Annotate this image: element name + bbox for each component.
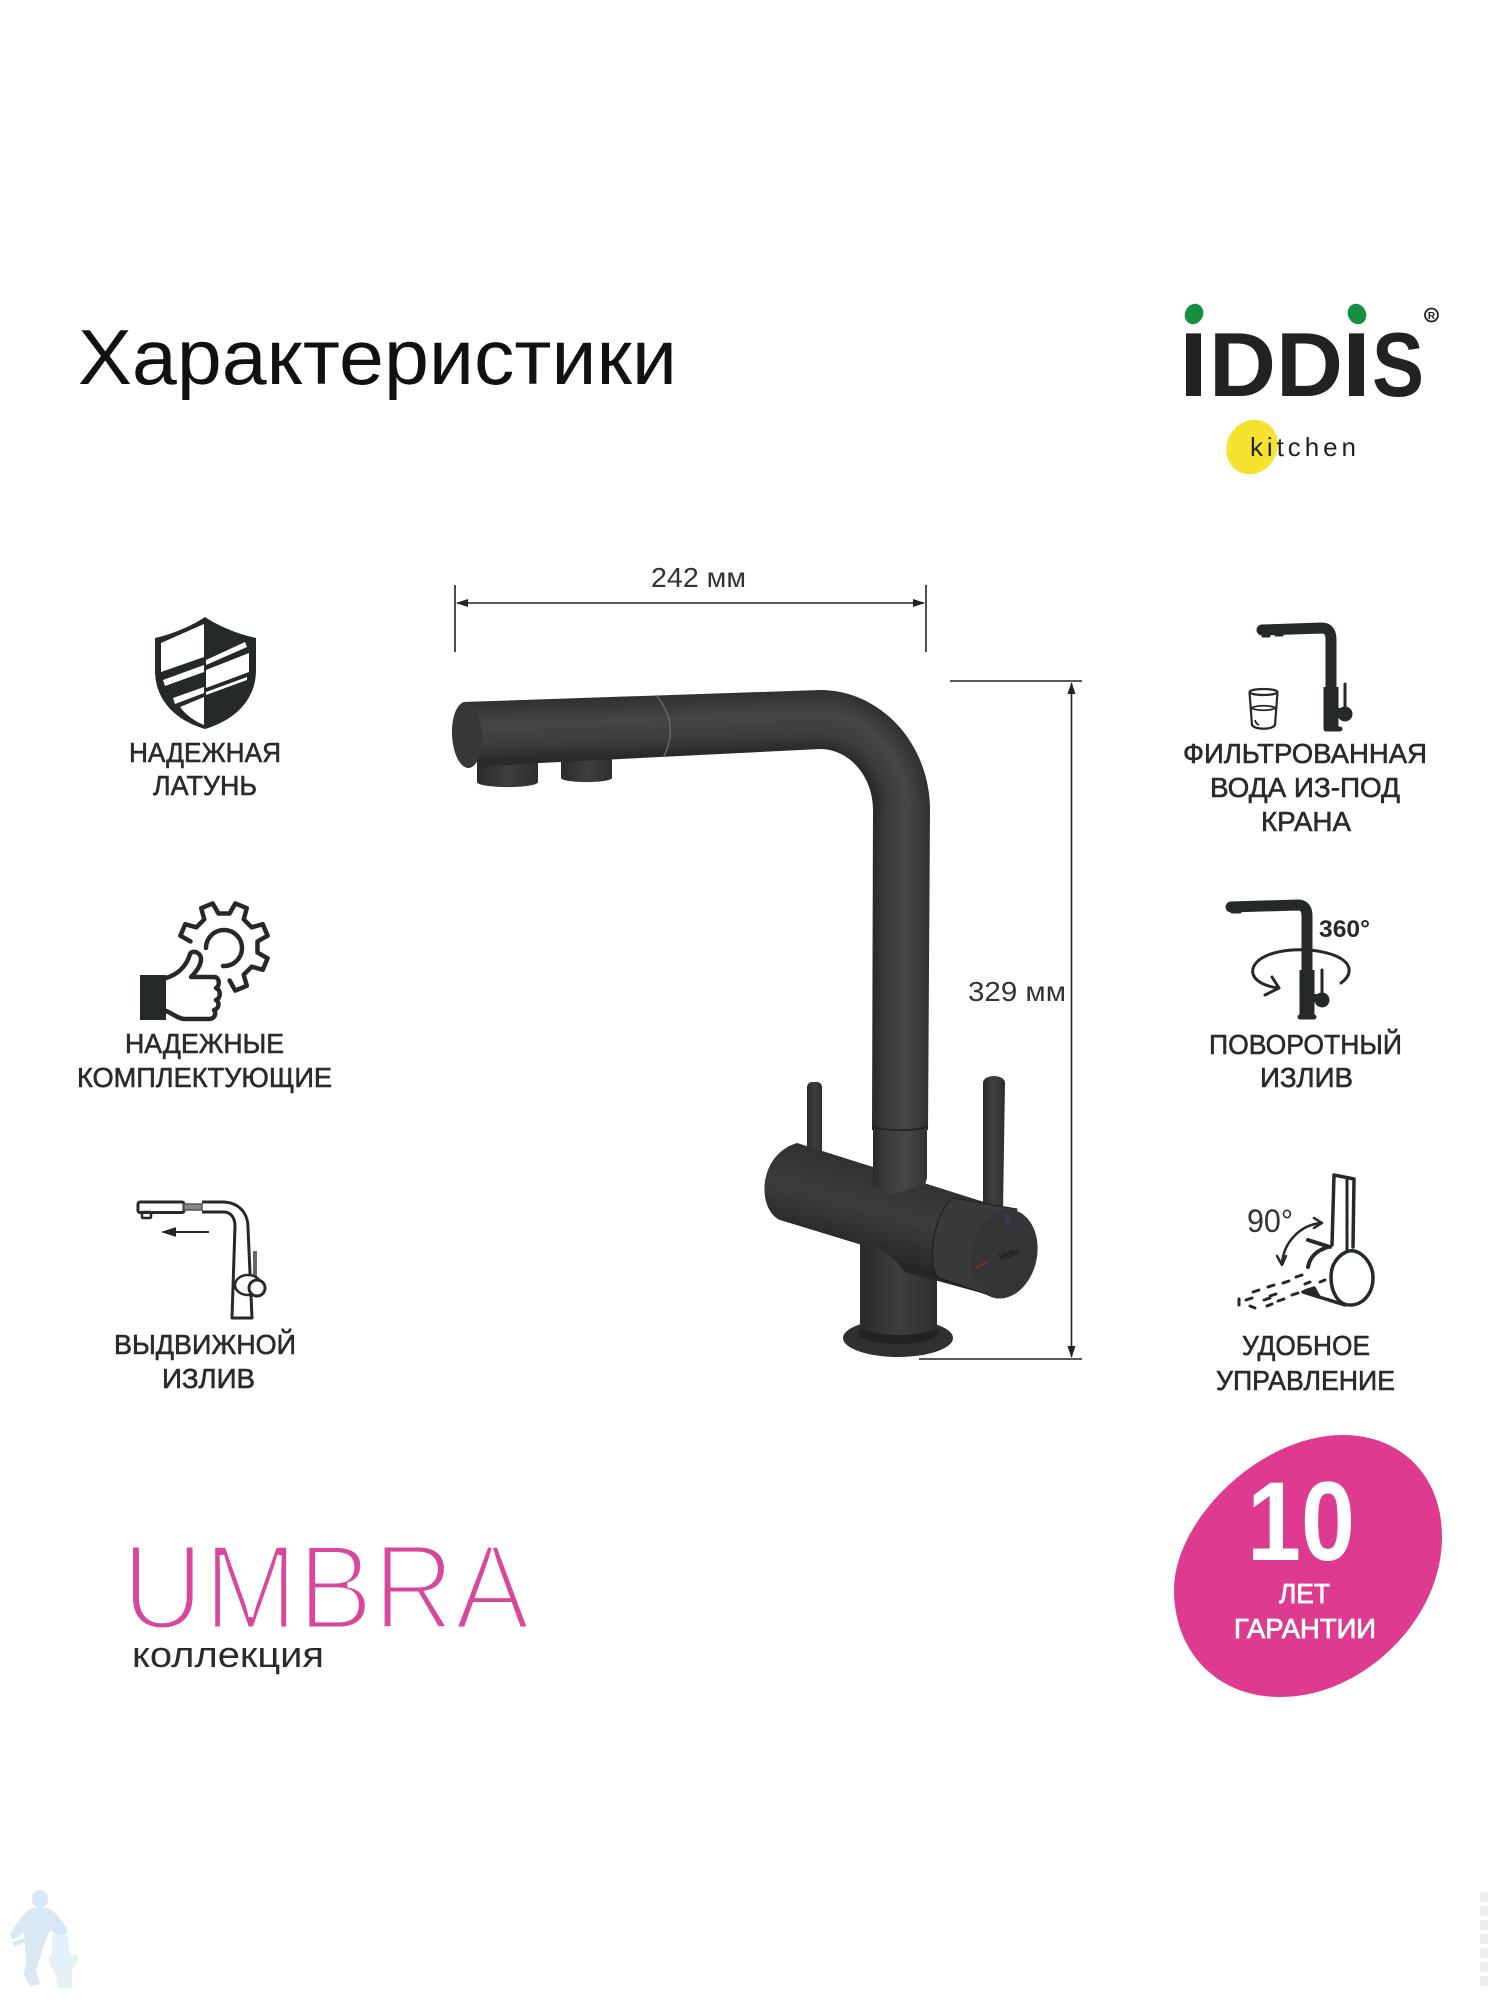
pull-out seam (656, 695, 670, 756)
icon: pull-out faucet outline (138, 1202, 265, 1318)
collection caption: коллекция (132, 1634, 324, 1675)
kitchen text: kitchen (1250, 432, 1356, 462)
dimension: height 329 mm (919, 681, 1082, 1359)
registered mark (1425, 308, 1438, 322)
feature: convenient control (1216, 1175, 1395, 1396)
vertical riser (872, 810, 930, 1130)
lever right (983, 1076, 1005, 1213)
label: НАДЕЖНАЯ (129, 737, 281, 768)
feature: filtered water (1183, 628, 1427, 837)
logo wordmark: I (1342, 315, 1371, 416)
spout bend (820, 690, 930, 810)
label: ИЗЛИВ (1260, 1062, 1353, 1093)
icon: swivel faucet (1231, 905, 1330, 1017)
watermark: plumber figure (10, 1890, 79, 1988)
360 degrees: 360° (1319, 916, 1370, 943)
hot and cold marks (975, 1214, 1008, 1268)
label: ФИЛЬТРОВАННАЯ (1183, 738, 1427, 769)
registered mark: R (1428, 311, 1436, 322)
label (1209, 1029, 1402, 1093)
feature: swivel spout (1209, 905, 1402, 1093)
feature: pull-out spout (114, 1202, 296, 1394)
logo wordmark: S (1372, 315, 1424, 416)
label: НАДЕЖНЫЕ (125, 1028, 284, 1059)
label: ИЗЛИВ (162, 1363, 255, 1394)
mixer cap face (962, 1203, 1046, 1305)
warranty caption: ГАРАНТИИ (1234, 1613, 1376, 1644)
watermark: site mark (1480, 1892, 1488, 1986)
logo wordmark: I (1179, 315, 1208, 416)
UMBRA wordmark: UMBRA (122, 1519, 531, 1655)
yellow spot (1216, 410, 1288, 484)
feature: reliable components (77, 903, 332, 1093)
90 degrees: 90° (1247, 1203, 1293, 1239)
spout end cap (450, 701, 484, 769)
mixer body (764, 1143, 1003, 1298)
number 10: 10 (1247, 1459, 1355, 1584)
pink blob (1174, 1435, 1442, 1697)
label: ВОДА ИЗ-ПОД (1210, 772, 1400, 803)
spout horizontal section (463, 690, 820, 767)
warranty caption (1234, 1578, 1376, 1644)
icon: faucet silhouette (1262, 628, 1352, 729)
logo green dots (1181, 301, 1370, 327)
arrow: pull direction (164, 1228, 209, 1236)
dimension: width 242 mm (455, 562, 926, 652)
tiny brand on cap: iddis (998, 1246, 1021, 1262)
icon: shield (155, 617, 256, 729)
label (77, 1028, 332, 1093)
feature: reliable brass (129, 617, 281, 801)
pedestal and base (843, 1235, 953, 1357)
label (1183, 738, 1427, 837)
label: ПОВОРОТНЫЙ (1209, 1029, 1402, 1060)
label (114, 1329, 296, 1394)
label (129, 737, 281, 801)
dimension: width 242 mm: 242 мм (651, 562, 746, 593)
label: УПРАВЛЕНИЕ (1216, 1365, 1395, 1396)
label (1216, 1330, 1395, 1396)
mixer cap side (933, 1198, 1017, 1298)
collection name (122, 1519, 531, 1675)
logo wordmark (1179, 315, 1424, 416)
lever left (807, 1082, 822, 1154)
dimension: height 329 mm: 329 мм (968, 976, 1066, 1007)
label: КОМПЛЕКТУЮЩИЕ (77, 1062, 332, 1093)
label: ВЫДВИЖНОЙ (114, 1329, 296, 1360)
icon: gear and thumb up (140, 903, 268, 1020)
logo wordmark: D (1209, 315, 1276, 416)
label: ЛАТУНЬ (153, 770, 257, 801)
brand logo (1179, 301, 1438, 484)
aerator outlets (477, 745, 612, 787)
logo wordmark: D (1276, 315, 1343, 416)
icon: lever at 90 degrees (1239, 1175, 1373, 1308)
icon: glass of water (1250, 689, 1278, 729)
product photo: black faucet (450, 690, 1046, 1357)
label: КРАНА (1261, 806, 1351, 837)
warranty caption: ЛЕТ (1279, 1578, 1330, 1609)
riser collar (873, 1127, 927, 1193)
warranty badge (1174, 1435, 1442, 1697)
rotation arrow (1253, 950, 1349, 995)
label: УДОБНОЕ (1242, 1330, 1370, 1361)
title: Характеристики (78, 313, 677, 401)
